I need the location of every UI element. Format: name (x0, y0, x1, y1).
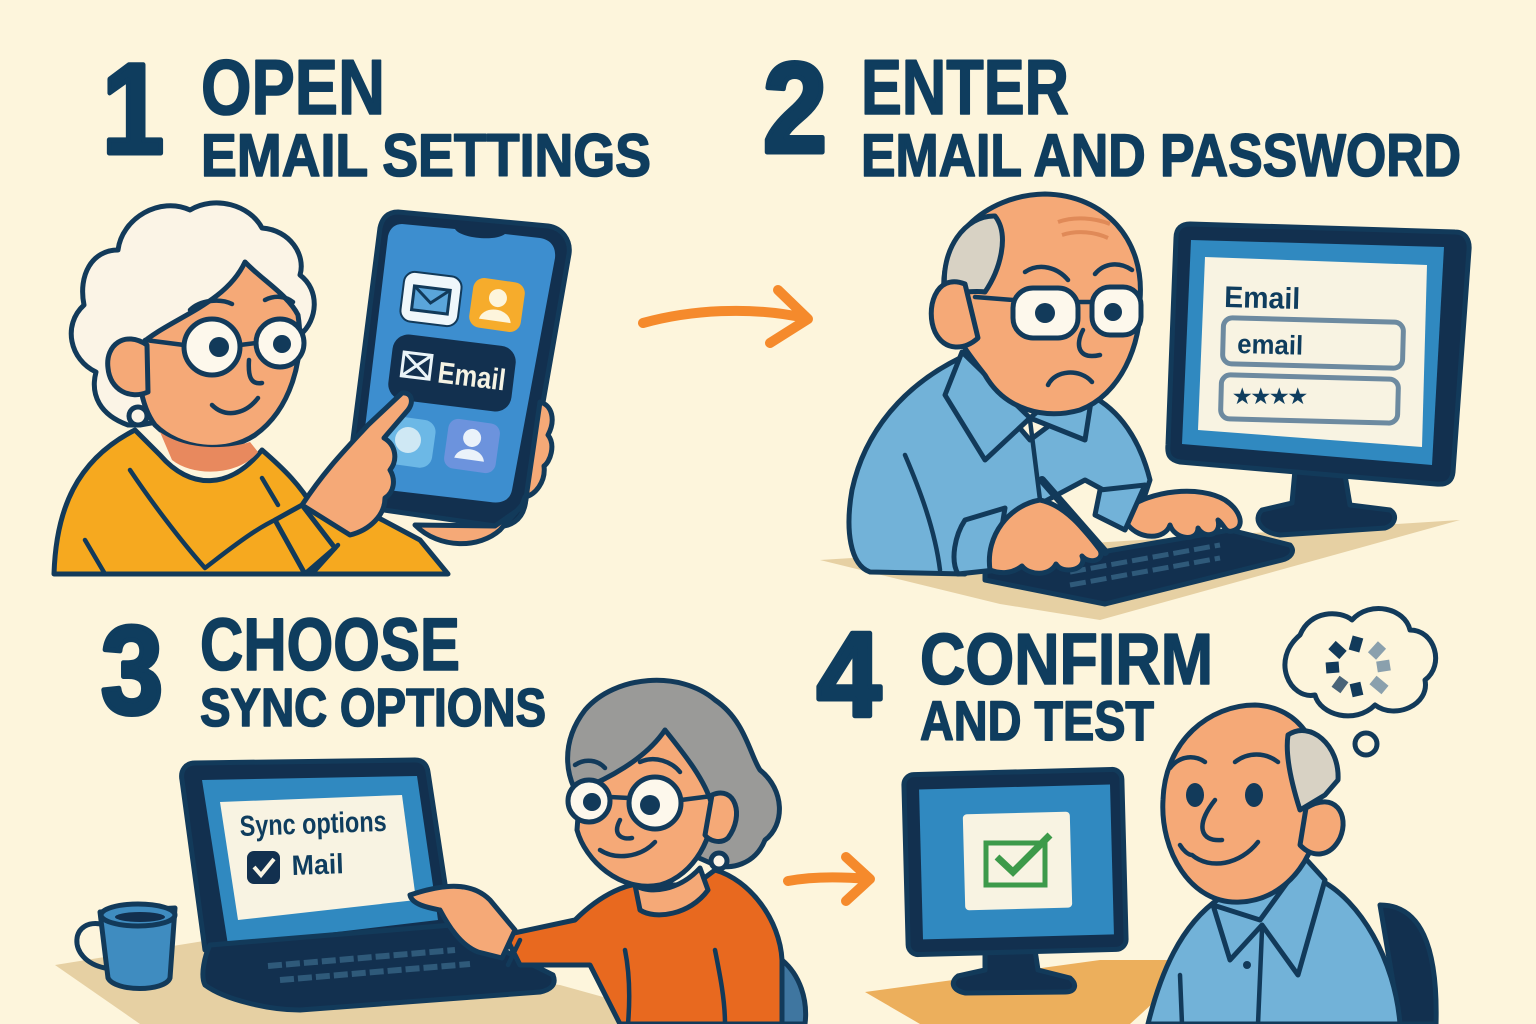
loading spinner (1326, 637, 1390, 696)
password input (1220, 375, 1399, 423)
laptop base (203, 925, 554, 1010)
laptop (182, 760, 554, 1010)
email input (1222, 318, 1404, 368)
email row button (386, 333, 518, 413)
forehead lines (1058, 218, 1110, 238)
monitor screen (919, 784, 1114, 939)
glasses (975, 287, 1141, 338)
button (1243, 961, 1251, 969)
neck shadow (160, 432, 258, 472)
chair back (1380, 905, 1436, 1024)
heading: step 3: CHOOSE (200, 603, 460, 686)
app icon: contact (468, 277, 526, 333)
face lines (1025, 264, 1132, 385)
hand on phone and pointing finger (302, 393, 411, 535)
heading: step 3: SYNC OPTIONS (200, 678, 546, 738)
heading: step 3 (101, 602, 546, 740)
heading: step 2 (763, 37, 1461, 189)
monitor (1168, 224, 1469, 535)
face (577, 730, 712, 886)
man's shirt (849, 358, 1150, 574)
collar and placket (1213, 858, 1325, 975)
man's ear (931, 282, 978, 347)
app icon: mail (399, 271, 463, 327)
heading: step 4: CONFIRM (920, 620, 1213, 700)
sweater (505, 870, 782, 1024)
illustration: woman with phone (54, 203, 569, 574)
heading: step 2: 2 (763, 37, 827, 180)
sweater lines (508, 940, 725, 1024)
glasses (568, 777, 712, 829)
monitor: ★★★★ (1233, 386, 1307, 408)
phone screen (359, 224, 555, 502)
monitor (904, 769, 1126, 993)
man's head (944, 194, 1140, 414)
heading: step 1: OPEN (201, 43, 385, 131)
check icon (986, 835, 1050, 885)
arrow: step 3 to step 4 (788, 857, 870, 901)
sync options label: Sync options (239, 806, 387, 843)
side hair (944, 216, 1002, 292)
heading: step 4 (817, 608, 1213, 752)
laptop screen (202, 776, 438, 945)
hair (71, 203, 314, 425)
thought bubble (1285, 609, 1436, 755)
heading: step 4: 4 (817, 608, 881, 742)
mug (77, 904, 175, 988)
earring (129, 407, 147, 425)
woman's body: yellow sweater (54, 430, 448, 574)
desk (820, 520, 1460, 620)
face (139, 262, 300, 447)
left hand with stylus (989, 500, 1101, 573)
collar (945, 352, 1092, 460)
desk (865, 960, 1200, 1024)
email row button: Email (436, 356, 507, 397)
heading: step 3: 3 (101, 602, 163, 740)
arrow: step 1 to step 2 (643, 290, 808, 343)
shirt lines (905, 420, 1040, 570)
ear (1300, 802, 1343, 854)
mail label: Mail (291, 848, 344, 881)
monitor screen (1182, 240, 1444, 465)
form label: Email (1224, 281, 1301, 316)
heading: step 1: 1 (102, 38, 164, 181)
cuff (275, 505, 335, 574)
ear (108, 339, 148, 395)
woman's grey hair (568, 680, 779, 867)
illustration: woman with laptop (55, 680, 806, 1024)
left cuff (954, 508, 1005, 574)
stylus (1042, 480, 1105, 552)
phone (347, 212, 569, 526)
heading: step 1 (102, 38, 651, 189)
illustration: man at desktop (820, 194, 1469, 620)
heading: step 2: ENTER (861, 43, 1069, 131)
right cuff (1095, 485, 1145, 530)
chair back (782, 960, 806, 1024)
illustration: man with desktop and thought bubble (865, 609, 1436, 1024)
heading: step 4: AND TEST (920, 689, 1154, 752)
app icon: heart (381, 415, 437, 469)
shirt lines (1180, 930, 1262, 1024)
app icon: contact blue (443, 418, 501, 474)
keyboard (985, 530, 1292, 604)
checkbox (247, 851, 280, 884)
fingers behind the phone (415, 402, 552, 544)
head (1163, 705, 1321, 902)
smile and eyebrows (190, 297, 293, 413)
man's shirt (1148, 862, 1400, 1024)
pointing hand (410, 886, 515, 958)
side hair (1287, 731, 1338, 810)
confirmation card (963, 812, 1072, 910)
monitor: email (1237, 329, 1304, 361)
heading: step 2: EMAIL AND PASSWORD (861, 122, 1461, 189)
face lines (575, 759, 680, 856)
glasses (145, 319, 304, 375)
face (1170, 754, 1278, 864)
sweater fold lines (85, 470, 338, 574)
table (55, 940, 700, 1024)
ear and earring (705, 793, 737, 841)
neck (635, 868, 708, 915)
right hand (1125, 491, 1240, 537)
heading: step 1: EMAIL SETTINGS (201, 122, 651, 189)
